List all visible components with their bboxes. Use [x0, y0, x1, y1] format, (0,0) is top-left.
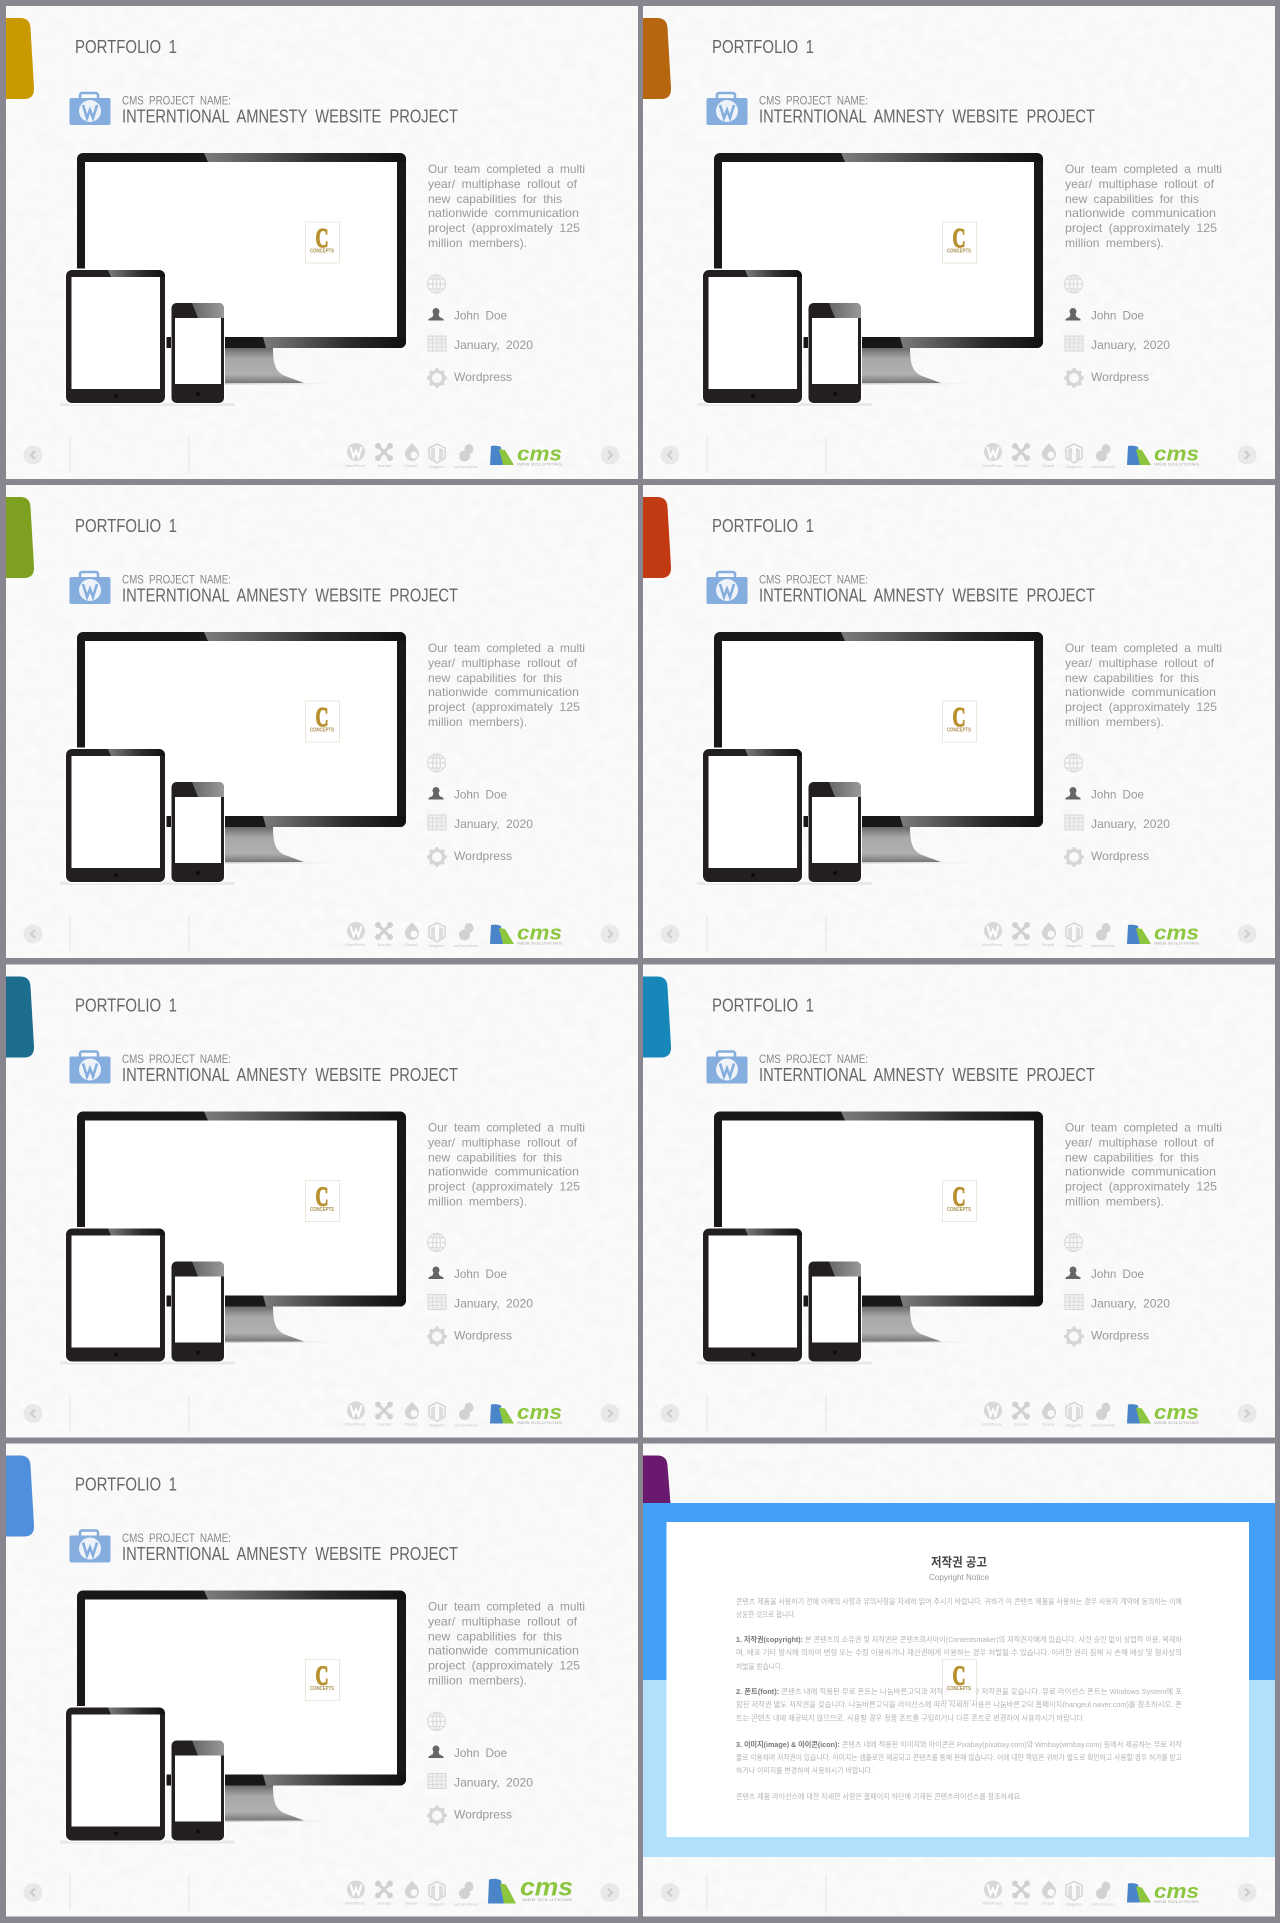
icon: calendar — [1065, 336, 1083, 351]
project label: CMS PROJECT NAME: — [122, 572, 231, 586]
logo card: CONCEPTS — [310, 248, 335, 254]
CMS platform icons: Drupal — [405, 1422, 417, 1426]
description: project (approximately 125 — [428, 221, 580, 235]
colour tab — [643, 497, 671, 578]
logo card: CONCEPTS — [947, 728, 972, 734]
icon: calendar — [428, 815, 446, 830]
panel background — [643, 964, 1275, 1438]
panel: portfolio cerulean — [643, 964, 1275, 1438]
previous arrow — [660, 1404, 680, 1423]
icon: gear — [427, 1806, 447, 1826]
description: year/ multiphase rollout of — [428, 1136, 578, 1150]
date: January, 2020 — [1091, 338, 1170, 352]
cms logo: cms — [1154, 1881, 1199, 1903]
logo card: C — [316, 1660, 328, 1690]
footer dividers — [70, 916, 189, 952]
cms logo: WEB SOLUTIONS — [1154, 940, 1199, 946]
project name: INTERNTIONAL AMNESTY WEBSITE PROJECT — [122, 1065, 458, 1085]
description — [428, 641, 585, 729]
panel: portfolio amber — [6, 6, 638, 479]
panel background — [643, 1444, 1275, 1916]
CMS platform icons: Drupal — [1042, 1900, 1054, 1906]
cms logo — [1127, 444, 1199, 466]
logo card: C — [952, 1182, 966, 1212]
cms logo (large) — [488, 1874, 573, 1904]
icon: gear — [427, 368, 447, 388]
description: Our team completed a multi — [428, 162, 585, 176]
panel background — [6, 964, 638, 1438]
previous arrow — [660, 446, 680, 464]
author: John Doe — [454, 1746, 507, 1760]
title: PORTFOLIO 1 — [712, 516, 814, 536]
notice body text: 콘텐츠 제품을 사용하기 전에 아래의 사항과 유의사항을 자세히 읽어 주시기 바랍니다. 귀하가 이 콘텐츠 제품을 사용하는 경우 사용자 계약에 동의하는 이에 — [736, 1596, 1182, 1606]
project name: INTERNTIONAL AMNESTY WEBSITE PROJECT — [122, 106, 458, 126]
footer dividers — [70, 437, 189, 473]
notice body text: 하거나 이미지를 변경하여 사용하시기 바랍니다. — [736, 1765, 873, 1775]
description: new capabilities for this — [1065, 1150, 1199, 1164]
CMS platform icons: Magento — [429, 464, 446, 469]
previous arrow — [660, 924, 680, 944]
cms logo: WEB SOLUTIONS — [1154, 1899, 1199, 1904]
CMS platform icons: Magento — [429, 943, 446, 948]
CMS platform icons — [345, 922, 479, 948]
panel: portfolio teal — [6, 964, 638, 1438]
light blue band — [643, 1680, 1275, 1857]
footer dividers — [70, 1396, 189, 1432]
notice body text: 2. 폰트(font): 콘텐츠 내에 적용된 무료 폰트는 나눔바른고딕과 저작권 보유자가 저작권을 갖습니다. 유료 라이선스 폰트는 Windows System에 포 — [736, 1686, 1182, 1696]
CMS platform icons: WordPress — [345, 463, 365, 468]
panel background — [6, 6, 638, 479]
CMS platform icons: Joomla! — [1014, 942, 1028, 947]
date: January, 2020 — [1091, 1296, 1170, 1310]
platform: Wordpress — [454, 1808, 512, 1822]
description — [1065, 641, 1222, 729]
logo card — [942, 1180, 976, 1222]
description: million members). — [428, 1674, 527, 1688]
description: nationwide communication — [428, 206, 579, 220]
CMS platform icons: Drupal — [405, 1900, 417, 1906]
notice body text: 며, 배포 기타 방식에 의하여 변형 또는 수정 이용하거나 재산권에게 이용하는 경우 처벌될 수 있습니다. 이러한 권리 침해 시 손해 배상 및 형사상의 — [736, 1647, 1182, 1657]
CMS platform icons: Magento — [1066, 464, 1083, 469]
description: new capabilities for this — [428, 1150, 562, 1164]
previous arrow — [24, 446, 42, 464]
title: PORTFOLIO 1 — [75, 1474, 177, 1494]
project name: INTERNTIONAL AMNESTY WEBSITE PROJECT — [122, 1544, 458, 1564]
CMS platform icons: Drupal — [405, 463, 417, 468]
description: new capabilities for this — [1065, 671, 1199, 685]
CMS platform icons: Joomla! — [377, 463, 391, 468]
project name: INTERNTIONAL AMNESTY WEBSITE PROJECT — [759, 586, 1095, 606]
icon: person — [428, 1746, 444, 1758]
logo card: CONCEPTS — [310, 728, 335, 734]
author: John Doe — [1091, 1267, 1144, 1281]
cms logo: WEB SOLUTIONS — [517, 1420, 562, 1425]
description: nationwide communication — [1065, 685, 1216, 699]
logo card — [942, 701, 976, 742]
panel: portfolio blue — [6, 1444, 638, 1916]
description: million members). — [1065, 1194, 1164, 1208]
icon: globe — [428, 275, 446, 293]
title: PORTFOLIO 1 — [712, 37, 814, 57]
logo card — [306, 222, 340, 263]
logo card: C — [952, 223, 966, 253]
description — [1065, 162, 1222, 250]
description: nationwide communication — [1065, 1164, 1216, 1178]
cms logo (large): WEB SOLUTIONS — [522, 1897, 572, 1902]
notice body text: 트는 콘텐츠 내에 제공되지 않으므로, 사용할 경우 정품 폰트를 구입하거나 다른 폰트로 변경하여 사용하시기 바랍니다. — [736, 1712, 1085, 1722]
notice heading: 저작권 공고 — [931, 1554, 987, 1570]
next arrow — [600, 446, 620, 464]
logo card — [942, 222, 976, 263]
CMS platform icons: osCommerce — [1091, 464, 1116, 469]
icon: briefcase — [70, 572, 110, 604]
CMS platform icons: Joomla! — [1014, 1900, 1028, 1906]
CMS platform icons: Joomla! — [1014, 463, 1028, 468]
footer dividers — [707, 1396, 826, 1432]
title: PORTFOLIO 1 — [75, 37, 177, 57]
colour tab — [6, 497, 34, 578]
footer dividers — [707, 1874, 826, 1910]
CMS platform icons: Drupal — [1042, 942, 1054, 947]
devices illustration — [60, 1590, 406, 1844]
CMS platform icons: osCommerce — [1091, 1422, 1116, 1428]
icon: person — [428, 1266, 444, 1279]
icon: calendar — [428, 1294, 446, 1310]
CMS platform icons — [345, 1402, 479, 1428]
description: project (approximately 125 — [428, 1180, 580, 1194]
CMS platform icons: Joomla! — [377, 1422, 391, 1426]
description — [428, 1120, 585, 1208]
description: year/ multiphase rollout of — [428, 177, 578, 191]
icon: person — [428, 787, 444, 800]
CMS platform icons: WordPress — [982, 1900, 1002, 1906]
CMS platform icons: Drupal — [1042, 463, 1054, 468]
CMS platform icons: WordPress — [345, 942, 365, 947]
description: million members). — [428, 236, 527, 250]
icon: person — [1066, 308, 1080, 320]
CMS platform icons — [345, 1880, 479, 1906]
next arrow — [1238, 1404, 1256, 1423]
logo card: CONCEPTS — [947, 1686, 972, 1692]
icon: calendar — [1065, 815, 1083, 830]
panel: portfolio orange — [643, 6, 1275, 479]
CMS platform icons: WordPress — [345, 1422, 365, 1426]
description: million members). — [1065, 236, 1164, 250]
description: nationwide communication — [1065, 206, 1216, 220]
devices illustration — [697, 632, 1043, 885]
CMS platform icons — [982, 1880, 1116, 1906]
project label: CMS PROJECT NAME: — [759, 94, 868, 108]
logo card: C — [316, 1182, 328, 1212]
description: nationwide communication — [428, 1644, 579, 1658]
next arrow — [1238, 1883, 1256, 1902]
platform: Wordpress — [454, 1328, 512, 1342]
description: Our team completed a multi — [1065, 1120, 1222, 1134]
icon: calendar — [428, 1774, 446, 1788]
icon: person — [428, 308, 444, 320]
logo card — [306, 1180, 340, 1222]
date: January, 2020 — [454, 1776, 533, 1790]
date: January, 2020 — [454, 338, 533, 352]
cms logo — [1127, 1402, 1199, 1425]
previous arrow — [24, 1404, 42, 1423]
description: year/ multiphase rollout of — [428, 1614, 578, 1628]
previous arrow — [24, 924, 42, 944]
notice body text — [736, 1596, 1182, 1801]
description: project (approximately 125 — [1065, 1180, 1217, 1194]
CMS platform icons: osCommerce — [454, 943, 479, 948]
cms logo — [490, 1402, 562, 1425]
icon: person — [1066, 1266, 1080, 1279]
CMS platform icons: WordPress — [982, 463, 1002, 468]
cms logo: cms — [517, 1402, 562, 1424]
logo card: C — [952, 702, 966, 732]
logo card — [942, 1660, 976, 1700]
title: PORTFOLIO 1 — [75, 996, 177, 1016]
author: John Doe — [454, 788, 507, 802]
cms logo: WEB SOLUTIONS — [517, 462, 562, 466]
CMS platform icons: WordPress — [345, 1900, 365, 1906]
CMS platform icons — [345, 443, 479, 469]
cms logo — [1127, 922, 1199, 946]
panel background — [643, 485, 1275, 958]
project label: CMS PROJECT NAME: — [122, 94, 231, 108]
icon: gear — [1064, 847, 1084, 867]
description: project (approximately 125 — [1065, 221, 1217, 235]
cms logo: WEB SOLUTIONS — [517, 940, 562, 946]
logo card: CONCEPTS — [947, 248, 972, 254]
description: Our team completed a multi — [1065, 162, 1222, 176]
platform: Wordpress — [1091, 849, 1149, 863]
devices illustration — [697, 153, 1043, 406]
date: January, 2020 — [454, 1296, 533, 1310]
icon: gear — [427, 1326, 447, 1346]
description: new capabilities for this — [428, 671, 562, 685]
notice subheading: Copyright Notice — [929, 1573, 990, 1582]
logo card: C — [952, 1660, 966, 1690]
description: million members). — [428, 1194, 527, 1208]
icon: briefcase — [70, 1052, 110, 1084]
icon: globe — [428, 754, 446, 772]
white notice card — [666, 1522, 1249, 1837]
description: million members). — [1065, 715, 1164, 729]
CMS platform icons: osCommerce — [1091, 1902, 1116, 1906]
platform: Wordpress — [1091, 370, 1149, 384]
cms logo — [1127, 1881, 1199, 1904]
description — [428, 1600, 585, 1688]
date: January, 2020 — [1091, 817, 1170, 831]
icon: globe — [1064, 275, 1082, 293]
author: John Doe — [454, 1267, 507, 1281]
icon: calendar — [428, 336, 446, 351]
colour tab — [6, 1456, 34, 1536]
description: Our team completed a multi — [1065, 641, 1222, 655]
description — [428, 162, 585, 250]
next arrow — [600, 1404, 620, 1423]
logo card: C — [316, 223, 328, 253]
platform: Wordpress — [1091, 1328, 1149, 1342]
blue band — [643, 1503, 1275, 1680]
description: Our team completed a multi — [428, 641, 585, 655]
CMS platform icons: Joomla! — [1014, 1422, 1028, 1426]
previous arrow — [24, 1883, 42, 1902]
description: new capabilities for this — [428, 1630, 562, 1644]
description — [1065, 1120, 1222, 1208]
CMS platform icons — [982, 443, 1116, 469]
icon: briefcase — [70, 93, 110, 125]
notice body text: 상응한 것으로 봅니다. — [736, 1609, 796, 1619]
CMS platform icons: Magento — [429, 1902, 446, 1906]
description: Our team completed a multi — [428, 1120, 585, 1134]
logo card: CONCEPTS — [310, 1686, 335, 1692]
logo card: CONCEPTS — [947, 1207, 972, 1213]
description: project (approximately 125 — [1065, 700, 1217, 714]
colour tab — [6, 18, 34, 99]
description: year/ multiphase rollout of — [428, 656, 578, 670]
CMS platform icons — [982, 922, 1116, 948]
footer dividers — [70, 1874, 189, 1910]
description: year/ multiphase rollout of — [1065, 177, 1215, 191]
description: project (approximately 125 — [428, 700, 580, 714]
project name: INTERNTIONAL AMNESTY WEBSITE PROJECT — [759, 1065, 1095, 1085]
cms logo — [490, 922, 562, 946]
CMS platform icons: WordPress — [982, 942, 1002, 947]
logo card: C — [316, 702, 328, 732]
panel: portfolio red — [643, 485, 1275, 958]
platform: Wordpress — [454, 370, 512, 384]
CMS platform icons: Magento — [1066, 1902, 1083, 1906]
project label: CMS PROJECT NAME: — [759, 572, 868, 586]
CMS platform icons: WordPress — [982, 1422, 1002, 1426]
logo card — [306, 1660, 340, 1700]
cms logo (large): cms — [520, 1874, 573, 1902]
next arrow — [600, 924, 620, 944]
colour tab — [6, 976, 34, 1058]
panel background — [6, 485, 638, 958]
icon: gear — [427, 847, 447, 867]
logo card: CONCEPTS — [310, 1207, 335, 1213]
description: year/ multiphase rollout of — [1065, 1136, 1215, 1150]
panel: portfolio green — [6, 485, 638, 958]
devices illustration — [60, 153, 406, 406]
footer dividers — [707, 437, 826, 473]
colour tab — [643, 1456, 671, 1510]
notice body text: 1. 저작권(copyright): 본 콘텐츠의 소유권 및 저작권은 콘텐츠회사아이(Contentsmaker)의 저작권자에게 있습니다. 사전 승인 없이 상업적 이용, 복제하 — [736, 1634, 1182, 1644]
next arrow — [600, 1883, 620, 1902]
CMS platform icons: Magento — [1066, 943, 1083, 948]
next arrow — [1238, 446, 1256, 464]
cms logo: cms — [517, 444, 562, 466]
CMS platform icons: osCommerce — [1091, 943, 1116, 948]
colour tab — [643, 18, 671, 99]
icon: briefcase — [70, 1530, 110, 1562]
cms logo: WEB SOLUTIONS — [1154, 462, 1199, 466]
icon: briefcase — [706, 1052, 748, 1084]
description: new capabilities for this — [428, 192, 562, 206]
description: nationwide communication — [428, 1164, 579, 1178]
project label: CMS PROJECT NAME: — [759, 1052, 868, 1066]
icon: briefcase — [706, 572, 748, 604]
platform: Wordpress — [454, 849, 512, 863]
author: John Doe — [454, 308, 507, 322]
description: year/ multiphase rollout of — [1065, 656, 1215, 670]
CMS platform icons: Drupal — [405, 942, 417, 947]
cms logo: WEB SOLUTIONS — [1154, 1420, 1199, 1425]
cms logo: cms — [1154, 1402, 1199, 1424]
notice body text: 3. 이미지(image) & 아이콘(icon): 콘텐츠 내에 적용된 이미지와 아이콘은 Pixabay(pixabay.com)와 Wmbay(wmbay.com) 등에서 제공하는 무료 저작 — [736, 1739, 1182, 1749]
description: Our team completed a multi — [428, 1600, 585, 1614]
CMS platform icons: osCommerce — [454, 1422, 479, 1428]
author: John Doe — [1091, 788, 1144, 802]
CMS platform icons: Drupal — [1042, 1422, 1054, 1426]
notice body text: 물로 이용하며 저작권이 있습니다. 이미지는 샘플로만 제공되고 콘텐츠를 통해 판매 않습니다. 이에 대한 책임은 귀하가 별도로 확인하고 사용할 경우 허가를 받고 — [736, 1752, 1182, 1762]
logo card — [306, 701, 340, 742]
cms logo — [490, 444, 562, 466]
devices illustration — [697, 1112, 1043, 1364]
devices illustration — [60, 1112, 406, 1364]
icon: calendar — [1065, 1294, 1083, 1310]
CMS platform icons: Magento — [429, 1422, 446, 1428]
panel background — [643, 6, 1275, 479]
icon: globe — [428, 1712, 446, 1730]
cms logo: cms — [1154, 444, 1199, 466]
CMS platform icons: Joomla! — [377, 942, 391, 947]
icon: globe — [428, 1234, 446, 1252]
icon: gear — [1064, 1326, 1084, 1346]
previous arrow — [660, 1883, 680, 1902]
icon: globe — [1064, 754, 1082, 772]
icon: gear — [1064, 368, 1084, 388]
footer — [660, 1874, 1256, 1910]
icon: globe — [1064, 1234, 1082, 1252]
cms logo: cms — [517, 922, 562, 944]
footer dividers — [707, 916, 826, 952]
title: PORTFOLIO 1 — [75, 516, 177, 536]
description: new capabilities for this — [1065, 192, 1199, 206]
title: PORTFOLIO 1 — [712, 996, 814, 1016]
project label: CMS PROJECT NAME: — [122, 1531, 231, 1545]
CMS platform icons: osCommerce — [454, 1902, 479, 1906]
icon: person — [1066, 787, 1080, 800]
description: million members). — [428, 715, 527, 729]
devices illustration — [60, 632, 406, 885]
date: January, 2020 — [454, 817, 533, 831]
colour tab — [643, 976, 671, 1058]
project label: CMS PROJECT NAME: — [122, 1052, 231, 1066]
CMS platform icons — [982, 1402, 1116, 1428]
notice body text: 처벌을 받습니다. — [736, 1661, 783, 1671]
CMS platform icons: Joomla! — [377, 1900, 391, 1906]
icon: briefcase — [706, 93, 748, 125]
next arrow — [1238, 924, 1256, 944]
CMS platform icons: Magento — [1066, 1422, 1083, 1428]
panel background — [6, 1444, 638, 1916]
project name: INTERNTIONAL AMNESTY WEBSITE PROJECT — [122, 586, 458, 606]
CMS platform icons: osCommerce — [454, 464, 479, 469]
notice body text: 함된 저작권 별도 저작권을 갖습니다. 나눔바른고딕을 라이선스에 따라 자세히 사용은 나눔바른고딕 홈페이지(hangeul.naver.com)를 참조하시오. 폰 — [736, 1699, 1182, 1709]
project name: INTERNTIONAL AMNESTY WEBSITE PROJECT — [759, 106, 1095, 126]
description: project (approximately 125 — [428, 1658, 580, 1672]
cms logo: cms — [1154, 922, 1199, 944]
description: nationwide communication — [428, 685, 579, 699]
author: John Doe — [1091, 308, 1144, 322]
notice body text: 콘텐츠 제품 라이선스에 대한 자세한 사항은 홈페이지 하단에 기재된 콘텐츠라이선스를 참조하세요. — [736, 1791, 1022, 1801]
panel: copyright notice — [643, 1444, 1275, 1916]
